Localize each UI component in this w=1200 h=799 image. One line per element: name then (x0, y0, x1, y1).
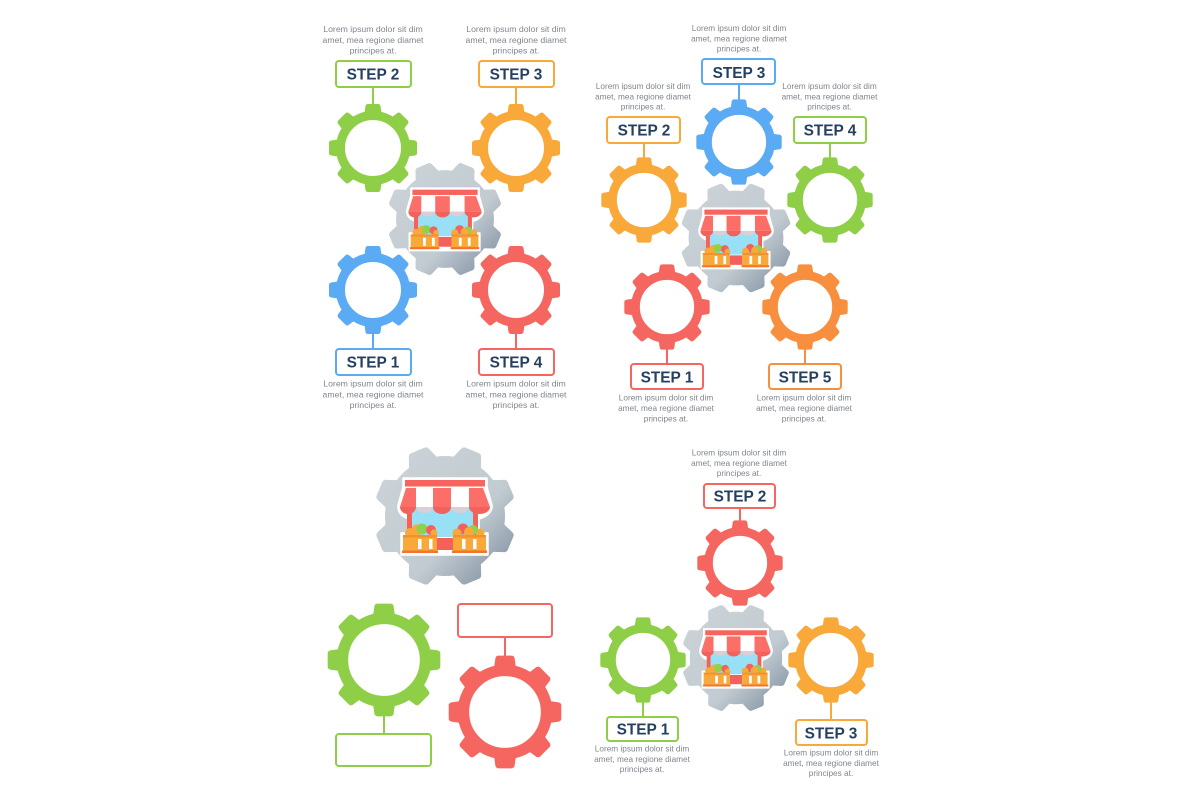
step 1 green (594, 617, 691, 774)
step 1 red: principes at. (644, 414, 688, 424)
step 4 green: amet, mea regione diamet (782, 92, 878, 102)
step 2 orange: Lorem ipsum dolor sit dim (596, 82, 690, 91)
step 1 red: Lorem ipsum dolor sit dim (619, 394, 713, 402)
red gear with empty label (449, 604, 561, 768)
step 3 orange: principes at. (809, 769, 853, 778)
step 1 blue: Lorem ipsum dolor sit dim (323, 378, 423, 388)
step 4 green (782, 82, 878, 243)
step 2 green (323, 24, 424, 192)
step 2 green: Lorem ipsum dolor sit dim (323, 24, 423, 34)
step 4 green: STEP 4 (804, 122, 857, 140)
step 2 red: principes at. (717, 469, 761, 478)
panel: blank elements bottom left (328, 443, 561, 768)
step 3 blue: amet, mea regione diamet (691, 34, 788, 44)
step 2 red: Lorem ipsum dolor sit dim (692, 448, 786, 458)
step 3 blue: STEP 3 (713, 65, 765, 82)
step 4 red: amet, mea regione diamet (466, 390, 567, 400)
step 3 orange: Lorem ipsum dolor sit dim (466, 24, 566, 34)
step 2 green: principes at. (350, 46, 396, 56)
step 5 dark orange: STEP 5 (779, 370, 832, 386)
large central gear with store icon (372, 443, 518, 589)
step 3 blue: Lorem ipsum dolor sit dim (692, 24, 786, 33)
step 4 red (466, 246, 567, 410)
green gear with empty label (328, 604, 440, 766)
step 5 dark orange (756, 264, 853, 424)
step 1 green: STEP 1 (617, 722, 670, 738)
step 4 red: principes at. (493, 400, 539, 410)
step 1 red (618, 264, 715, 424)
step 3 orange (466, 24, 567, 192)
step 3 orange: amet, mea regione diamet (783, 759, 880, 768)
step 3 orange: Lorem ipsum dolor sit dim (784, 748, 878, 758)
step 3 blue (691, 24, 788, 185)
step 3 orange: principes at. (493, 46, 539, 56)
step 1 red: amet, mea regione diamet (618, 404, 715, 413)
step 4 green: Lorem ipsum dolor sit dim (782, 82, 877, 91)
step 4 red: Lorem ipsum dolor sit dim (466, 378, 566, 388)
step 3 orange: amet, mea regione diamet (466, 35, 567, 45)
step 1 blue: amet, mea regione diamet (323, 390, 424, 400)
step 2 orange (595, 82, 692, 243)
step 3 orange (783, 617, 880, 778)
step 2 green: STEP 2 (347, 66, 399, 84)
step 2 orange: principes at. (621, 102, 665, 112)
step 1 blue: STEP 1 (347, 354, 400, 372)
panel: three steps bottom right (594, 448, 880, 778)
step 1 blue: principes at. (350, 400, 396, 410)
central gear with store icon (680, 602, 792, 714)
step 2 red: amet, mea regione diamet (691, 459, 788, 468)
step 1 green: amet, mea regione diamet (594, 755, 691, 764)
step 3 orange: STEP 3 (805, 726, 857, 742)
central gear with store icon (678, 180, 794, 296)
central gear with store icon (386, 160, 504, 278)
step 2 orange: STEP 2 (618, 122, 670, 140)
step 1 green: principes at. (620, 765, 664, 774)
step 2 red: STEP 2 (714, 488, 766, 506)
panel: five steps top right (595, 24, 878, 424)
step 3 orange: STEP 3 (490, 66, 542, 84)
step 2 red (691, 448, 788, 606)
panel: four steps top left (323, 24, 567, 410)
step 4 red: STEP 4 (490, 354, 543, 372)
step 4 green: principes at. (807, 102, 852, 112)
step 5 dark orange: Lorem ipsum dolor sit dim (757, 394, 851, 402)
step 5 dark orange: principes at. (782, 414, 826, 424)
step 1 blue (323, 246, 424, 410)
step 5 dark orange: amet, mea regione diamet (756, 404, 853, 413)
step 3 blue: principes at. (717, 44, 761, 54)
step 1 red: STEP 1 (641, 370, 694, 386)
step 1 green: Lorem ipsum dolor sit dim (595, 744, 689, 754)
step 2 green: amet, mea regione diamet (323, 35, 424, 45)
step 2 orange: amet, mea regione diamet (595, 92, 692, 102)
